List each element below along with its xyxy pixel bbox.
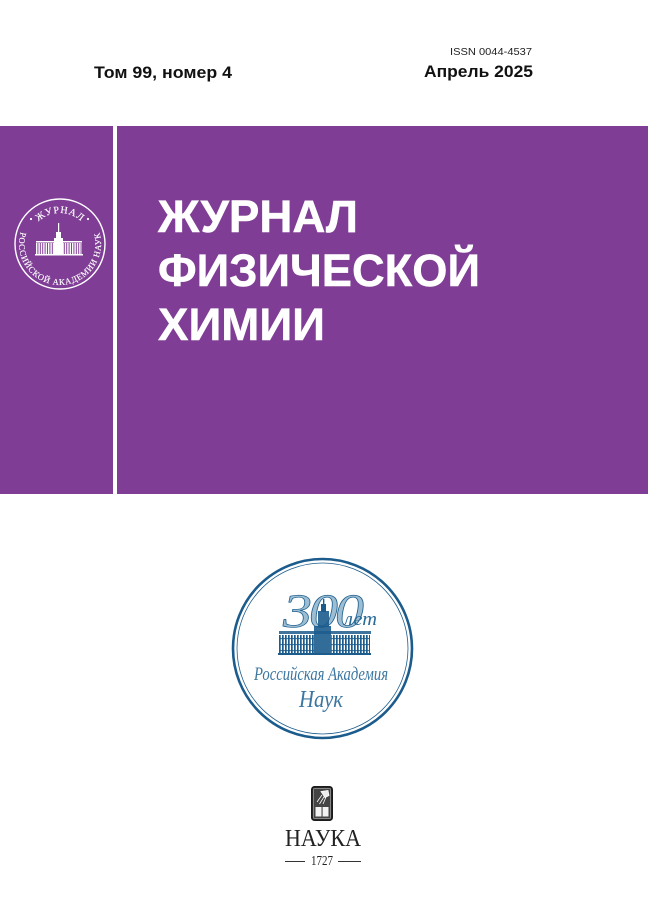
journal title: ЖУРНАЛ [157,191,358,242]
anniversary numeral: 3 [282,585,312,638]
academy building [278,599,371,655]
seal building [35,223,83,256]
publisher name: НАУКА [285,826,362,852]
icon: publisher emblem [311,786,333,821]
icon: journal seal [14,198,106,290]
volume and issue: Том 99, номер 4 [94,64,233,82]
seal bottom text: РОССИЙСКОЙ АКАДЕМИИ НАУК [19,232,102,286]
founding year: 1727 [311,854,333,869]
panel: left purple band [0,126,113,494]
anniversary numeral: 0 [335,585,364,638]
issue date: Апрель 2025 [424,63,533,81]
icon: 300 years anniversary seal [233,559,412,738]
anniversary numeral [282,585,364,638]
anniversary word: лет [343,609,377,630]
anniversary numeral: 0 [309,585,338,638]
science word: Наук [298,687,344,713]
academy name: Российская Академия [253,664,388,685]
publisher logo [285,786,362,869]
journal title: ХИМИИ [158,299,325,350]
journal title: ФИЗИЧЕСКОЙ [158,245,480,296]
journal title [157,191,480,350]
ISSN: ISSN 0044-4537 [450,46,532,58]
seal top text: ЖУРНАЛ [34,206,85,222]
panel: main purple band [117,126,648,494]
